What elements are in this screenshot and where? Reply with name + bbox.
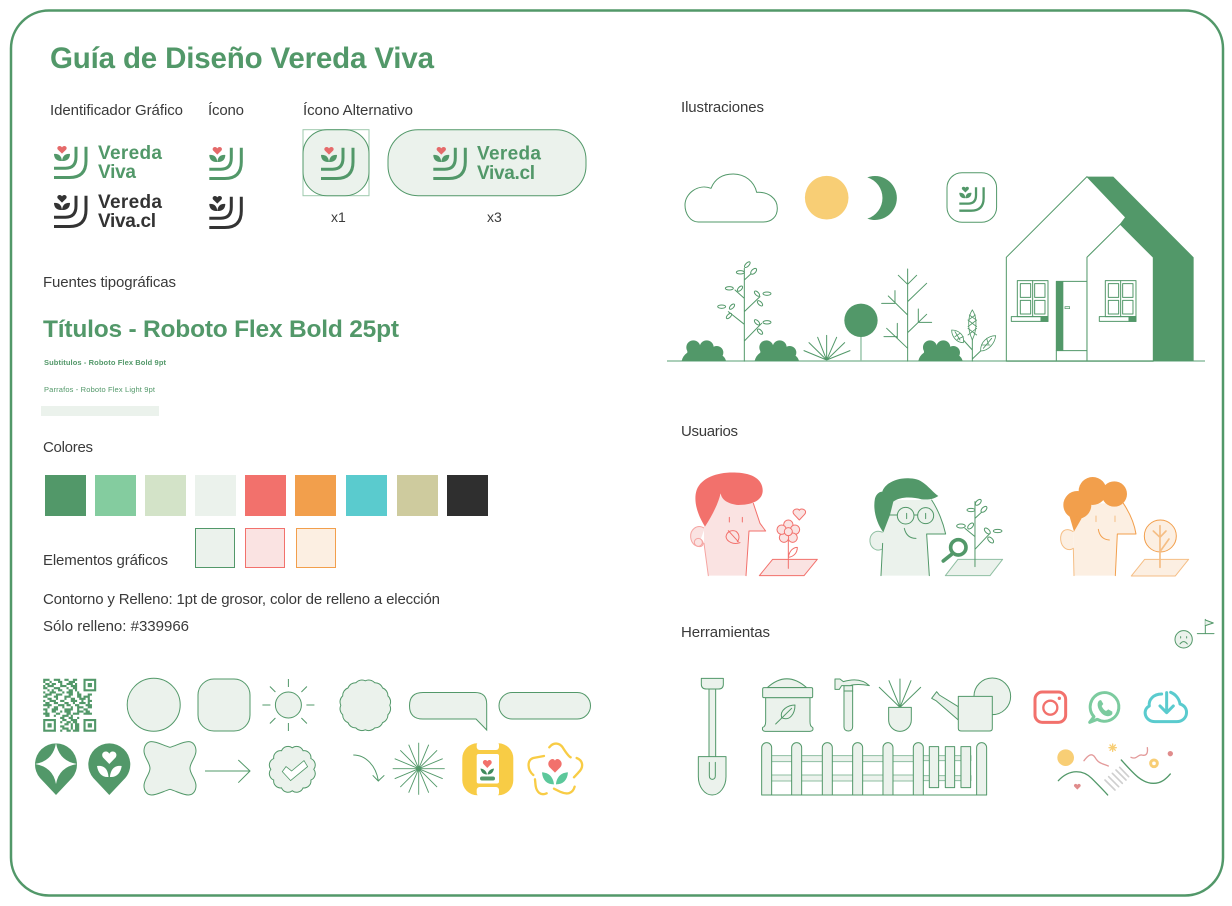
- illustration: leafy plant: [718, 261, 771, 361]
- section: elementos gráficos: Elementos gráficos: [43, 552, 168, 569]
- door: [1056, 281, 1087, 361]
- arrow: straight: [205, 760, 250, 783]
- icon: map pin with sprout: [88, 743, 130, 795]
- ground line: [667, 360, 1205, 362]
- section: fuentes tipográficas: Fuentes tipográficas: [43, 274, 176, 291]
- shape: rounded square: [198, 679, 250, 731]
- illustration: wheat: [952, 310, 996, 361]
- shape: circle: [127, 678, 180, 731]
- section: ícono: [208, 102, 244, 228]
- icon: check badge: [269, 746, 315, 792]
- section: identificador gráfico: Identificador Gráfico: [50, 102, 183, 119]
- illustration: house: [1006, 177, 1194, 361]
- user: red character with flower: [691, 473, 817, 576]
- section: identificador gráfico: Viva.cl: [98, 211, 156, 232]
- section: elementos gráficos: Sólo relleno: #339966: [43, 618, 189, 635]
- section: ícono alternativo: Viva.cl: [477, 163, 535, 184]
- heading: herramientas: Herramientas: [681, 624, 770, 641]
- icon: sun outline: [262, 679, 314, 731]
- shape: pill: [499, 692, 590, 719]
- shape: four-lobed blob: [144, 742, 196, 795]
- heading: ilustraciones: Ilustraciones: [681, 99, 764, 116]
- section: fuentes tipográficas: Parrafos - Roboto Flex Light 9pt: [44, 385, 156, 394]
- tool: hammer: [835, 679, 869, 731]
- arrow: curved: [353, 755, 384, 781]
- section: identificador gráfico: [50, 102, 183, 232]
- icon: cloud download: [1145, 692, 1187, 722]
- illustration: round tree: [844, 304, 878, 361]
- icon: yellow logo badge: [462, 742, 513, 796]
- icon: instagram: [1035, 692, 1066, 722]
- section: ícono alternativo: x1: [331, 209, 346, 225]
- section: ícono alternativo: x3: [487, 209, 502, 225]
- illustration: bushes: [682, 340, 963, 361]
- section: fuentes tipográficas: [41, 274, 399, 416]
- illustration: grass tuft: [804, 335, 850, 360]
- tool: seed bag: [762, 679, 813, 731]
- icon: flag: [1197, 619, 1214, 634]
- icon: flower logo with dashed outline: [529, 744, 582, 794]
- section: elementos gráficos: Contorno y Relleno: 1pt de grosor, color de relleno a elección: [43, 591, 440, 608]
- shape: wavy seal: [340, 680, 391, 731]
- user: orange character with tree: [1061, 477, 1189, 576]
- section: colores: [43, 439, 488, 516]
- icon: whatsapp: [1090, 693, 1119, 722]
- section: fuentes tipográficas: Títulos - Roboto Flex Bold 25pt: [43, 316, 399, 343]
- tool: watering can: [932, 678, 1011, 731]
- user: green character with magnifier: [870, 478, 1003, 576]
- window right: [1099, 281, 1136, 321]
- illustration: cloud: [685, 174, 777, 222]
- title: Guía de Diseño Vereda Viva: [50, 42, 435, 75]
- icon: sad face: [1175, 631, 1192, 648]
- shape: speech bubble: [410, 692, 487, 730]
- section: ícono: Ícono: [208, 102, 244, 119]
- section: identificador gráfico: Vereda: [98, 192, 162, 213]
- window left: [1011, 281, 1048, 321]
- illustration: moon: [867, 176, 897, 220]
- section: identificador gráfico: Viva: [98, 162, 136, 183]
- section: identificador gráfico: Vereda: [98, 143, 162, 164]
- section: fuentes tipográficas: Subtitulos - Roboto Flex Bold 9pt: [44, 358, 166, 367]
- heading: usuarios: Usuarios: [681, 423, 738, 440]
- section: ícono alternativo: Ícono Alternativo: [303, 102, 413, 119]
- illustration: branching tree: [882, 269, 932, 361]
- section: colores: Colores: [43, 439, 93, 456]
- illustration: logo tile: [947, 173, 997, 222]
- icon: QR code: [43, 680, 95, 731]
- tool: potted plant: [879, 679, 921, 731]
- tool: shovel: [698, 678, 726, 795]
- illustration: confetti shapes: [1057, 744, 1173, 795]
- illustration: sun: [805, 176, 848, 220]
- icon: map pin with star: [35, 743, 77, 795]
- section: ícono alternativo: [303, 102, 586, 225]
- icon: starburst: [393, 743, 445, 795]
- tool: fence: [762, 743, 987, 795]
- section: ícono alternativo: Vereda: [477, 144, 541, 164]
- section: elementos gráficos: [43, 528, 440, 635]
